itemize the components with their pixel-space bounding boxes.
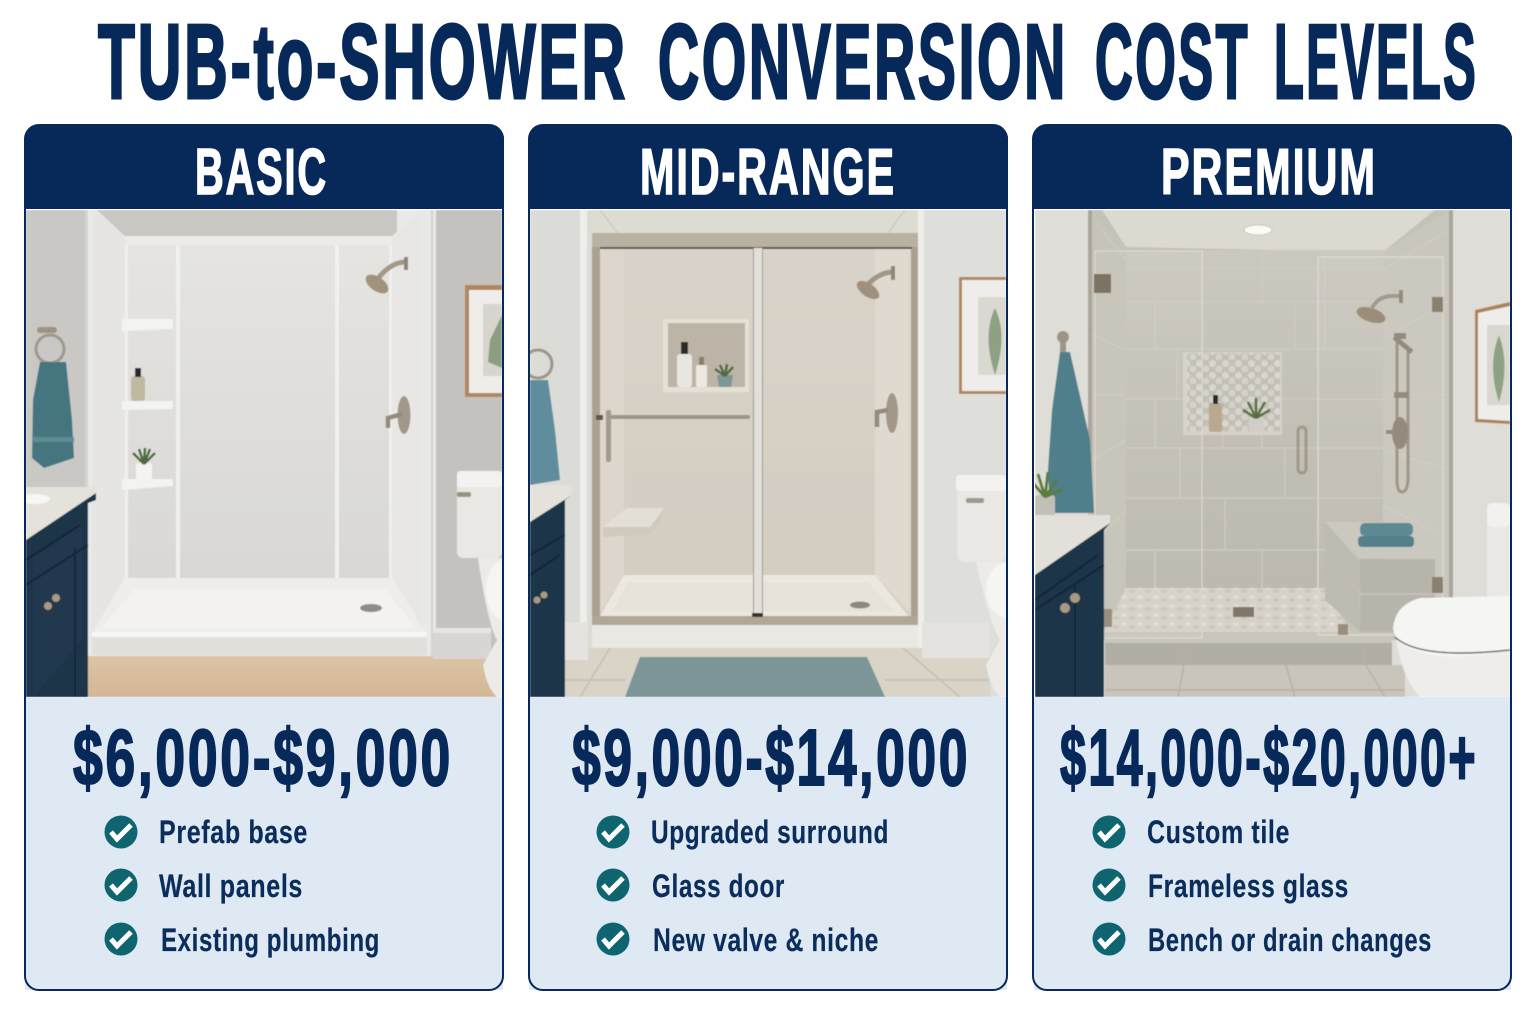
premium header: PREMIUM [1161,135,1377,208]
mid-range header: MID-RANGE [640,135,896,208]
basic header: BASIC [195,135,328,208]
title [98,3,1478,121]
panel: mid-range [524,125,1030,990]
basic card border [25,125,503,990]
premium shower photo illustration [1032,210,1510,697]
basic shower photo illustration [20,210,522,697]
mid-range body background [529,697,1007,990]
title: TUB-to-SHOWER [98,3,628,121]
basic header [25,125,504,209]
check item: glass door [596,868,785,904]
basic price: $6,000-$9,000 [73,713,453,802]
check item: glass door: Glass door [652,868,785,904]
check item: new valve and niche: New valve & niche [653,922,879,958]
check item: custom tile: Custom tile [1147,814,1290,850]
check item: existing plumbing [104,922,380,958]
basic checklist [104,814,380,958]
premium checklist [1092,814,1432,958]
check item: upgraded surround: Upgraded surround [651,814,889,850]
check item: wall panels [104,868,303,904]
title: COST [1095,3,1250,121]
check item: prefab base: Prefab base [159,814,308,850]
title: CONVERSION [658,3,1068,121]
mid-range card border [529,125,1007,990]
panel: basic [20,125,522,990]
premium card border [1033,125,1511,990]
mid-range shower photo illustration [524,210,1030,697]
check item: new valve and niche [596,922,879,958]
mid-range header [529,125,1008,209]
check item: frameless glass: Frameless glass [1148,868,1349,904]
mid-range price: $9,000-$14,000 [572,713,970,802]
check item: existing plumbing: Existing plumbing [161,922,380,958]
check item: bench or drain changes [1092,922,1432,958]
check item: upgraded surround [596,814,889,850]
check item: wall panels: Wall panels [159,868,303,904]
premium header [1033,125,1512,209]
basic body background [25,697,503,990]
check item: prefab base [104,814,308,850]
premium body background [1034,697,1511,990]
mid-range checklist [596,814,889,958]
check item: custom tile [1092,814,1290,850]
panel: premium [1032,125,1512,990]
check item: frameless glass [1092,868,1349,904]
check item: bench or drain changes: Bench or drain changes [1148,922,1432,958]
